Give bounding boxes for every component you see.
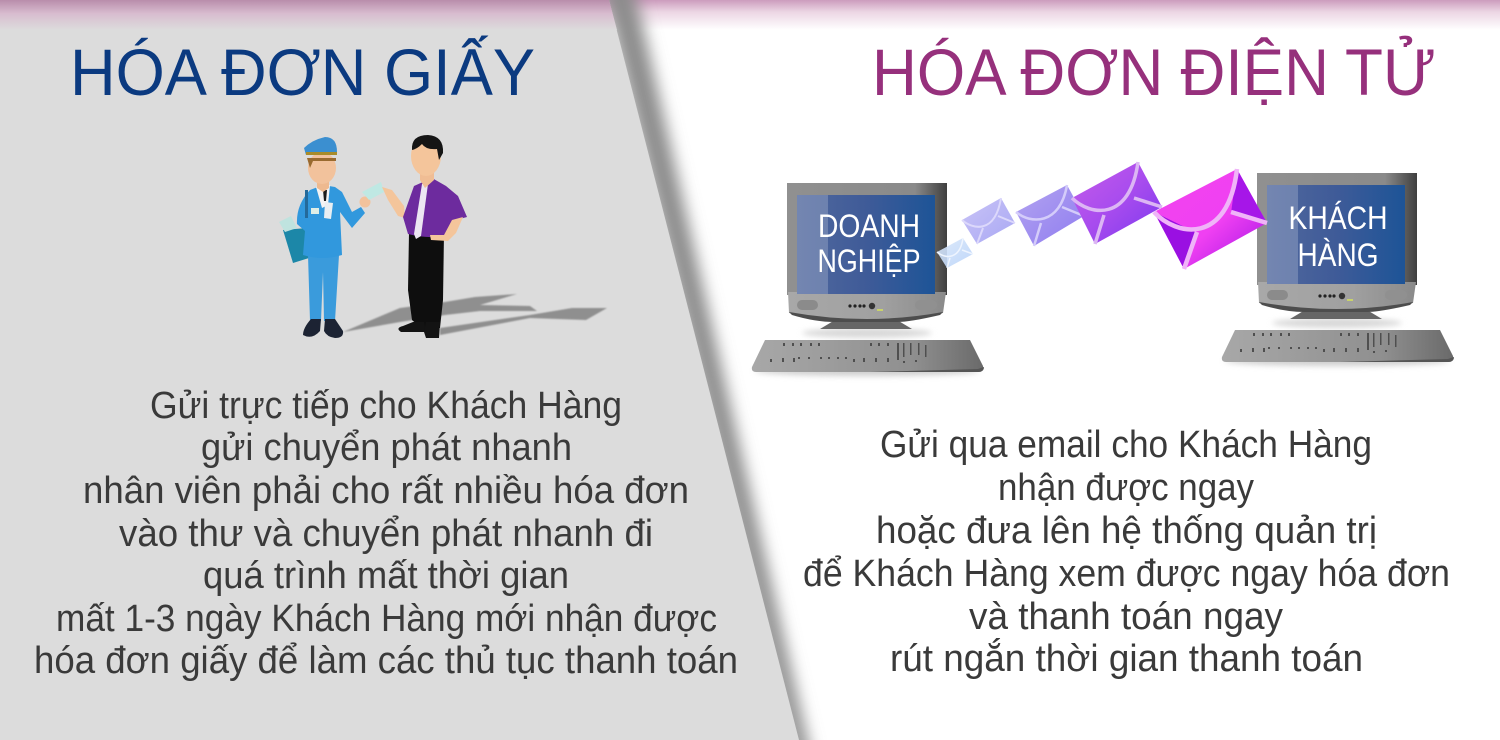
envelope 4 <box>1072 162 1162 244</box>
text block: electronic invoice description: hoặc đưa lên hệ thống quản trị <box>876 510 1377 552</box>
postman <box>279 137 384 338</box>
top pink band, right <box>600 0 1500 30</box>
cap <box>304 137 337 155</box>
text block: paper invoice description: quá trình mất thời gian <box>203 555 569 597</box>
neck and head <box>420 172 434 188</box>
envelope 2 <box>962 198 1015 244</box>
text block: paper invoice description: nhân viên phải cho rất nhiều hóa đơn <box>83 470 689 512</box>
man in purple shirt <box>382 135 467 338</box>
hand and card <box>360 196 370 208</box>
computer: customer <box>1222 173 1454 366</box>
computer: business <box>752 183 984 376</box>
text block: paper invoice description: hóa đơn giấy để làm các thủ tục thanh toán <box>34 640 738 682</box>
heading: electronic invoice: HÓA ĐƠN ĐIỆN TỬ <box>872 35 1436 109</box>
computer label: business: DOANH <box>818 208 920 244</box>
shadow of the figures <box>343 294 607 335</box>
illustration: postman handing an invoice to a man <box>279 135 607 338</box>
text block: paper invoice description: Gửi trực tiếp cho Khách Hàng <box>150 385 622 427</box>
text block: electronic invoice description: để Khách Hàng xem được ngay hóa đơn <box>803 553 1450 595</box>
text block: paper invoice description: vào thư và chuyển phát nhanh đi <box>119 513 653 555</box>
text block: paper invoice description: mất 1-3 ngày Khách Hàng mới nhận được <box>56 598 717 640</box>
computer label: customer: HÀNG <box>1298 237 1378 273</box>
top pink band, left <box>0 0 617 30</box>
trousers <box>308 255 339 321</box>
panel: paper invoice background <box>0 0 799 740</box>
jacket <box>297 185 365 258</box>
computer label: customer: KHÁCH <box>1288 200 1388 236</box>
arm reaching <box>382 187 405 218</box>
trousers <box>408 233 444 328</box>
tie <box>414 184 428 239</box>
shirt <box>403 178 467 237</box>
envelope 3 <box>1016 185 1084 246</box>
text block: electronic invoice description: Gửi qua email cho Khách Hàng <box>880 424 1372 466</box>
computer label: customer <box>1288 200 1388 273</box>
envelope 5 <box>1154 169 1267 269</box>
neck and head <box>317 176 329 192</box>
heading: paper invoice: HÓA ĐƠN GIẤY <box>70 35 535 109</box>
diagonal edge shadow <box>598 0 812 740</box>
shoes <box>303 319 321 337</box>
text block: electronic invoice description: rút ngắn thời gian thanh toán <box>890 637 1363 680</box>
text block: electronic invoice description <box>803 424 1450 680</box>
other forearm <box>430 217 463 241</box>
text block: paper invoice description: gửi chuyển phát nhanh <box>201 427 572 469</box>
text block: electronic invoice description: nhận được ngay <box>998 467 1254 509</box>
text block: electronic invoice description: và thanh toán ngay <box>969 596 1283 638</box>
bag <box>283 228 309 263</box>
text block: paper invoice description <box>34 385 738 682</box>
shoes <box>398 322 426 332</box>
computer label: business <box>818 208 920 279</box>
envelope 1 <box>937 238 973 268</box>
computer label: business: NGHIỆP <box>818 243 920 279</box>
illustration: emails travelling between two computers <box>752 162 1454 376</box>
